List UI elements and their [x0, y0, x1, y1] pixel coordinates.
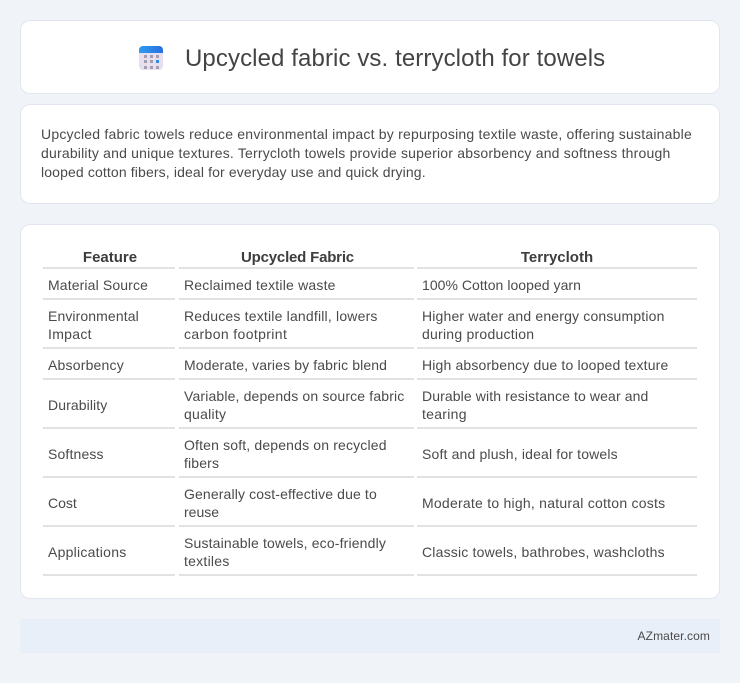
footer credit: AZmater.com [638, 629, 710, 643]
text: Absorbency [48, 357, 124, 373]
text: 100% Cotton looped yarn [422, 277, 581, 293]
title: Upcycled fabric vs. terrycloth for towels [185, 45, 605, 72]
table [43, 249, 697, 576]
intro paragraph: looped cotton fibers, ideal for everyday use and quick drying. [41, 164, 426, 180]
footer bar [20, 619, 720, 653]
row: applications [48, 535, 665, 569]
text: Environmental [48, 308, 139, 324]
text: Sustainable towels, eco-friendly [184, 535, 386, 551]
text: Feature [83, 249, 137, 266]
text: Generally cost-effective due to [184, 486, 377, 502]
text: Higher water and energy consumption [422, 308, 665, 324]
text: carbon footprint [184, 326, 287, 342]
text: Upcycled Fabric [241, 249, 354, 266]
row: absorbency [48, 357, 668, 373]
row: cost [48, 486, 665, 520]
text: Terrycloth [521, 249, 593, 266]
text: Material Source [48, 277, 148, 293]
text: Impact [48, 326, 92, 342]
text: Moderate to high, natural cotton costs [422, 495, 665, 511]
intro paragraph [41, 126, 692, 180]
text: Variable, depends on source fabric [184, 388, 404, 404]
text: Classic towels, bathrobes, washcloths [422, 544, 665, 560]
text: reuse [184, 504, 219, 520]
text: Reclaimed textile waste [184, 277, 336, 293]
row: durability [48, 388, 648, 422]
text: fibers [184, 455, 219, 471]
text: Moderate, varies by fabric blend [184, 357, 387, 373]
text: Applications [48, 544, 126, 560]
row: softness [48, 437, 618, 471]
panel: title header [20, 20, 720, 94]
text: textiles [184, 553, 230, 569]
text: Reduces textile landfill, lowers [184, 308, 378, 324]
text: Soft and plush, ideal for towels [422, 446, 618, 462]
panel: comparison table [20, 224, 720, 599]
text: Durable with resistance to wear and [422, 388, 648, 404]
row: environmental impact [48, 308, 665, 342]
row: material source [48, 277, 581, 293]
icon: calendar [139, 46, 163, 70]
text: Cost [48, 495, 77, 511]
text: Softness [48, 446, 104, 462]
intro paragraph: durability and unique textures. Terrycloth towels provide superior absorbency and softness through [41, 145, 670, 161]
text: Durability [48, 397, 107, 413]
text: High absorbency due to looped texture [422, 357, 668, 373]
text: Often soft, depends on recycled [184, 437, 387, 453]
text: during production [422, 326, 534, 342]
header row [83, 249, 593, 266]
text: quality [184, 406, 226, 422]
text: tearing [422, 406, 467, 422]
intro paragraph: Upcycled fabric towels reduce environmental impact by repurposing textile waste, offering sustainable [41, 126, 692, 142]
panel: intro text [20, 104, 720, 204]
